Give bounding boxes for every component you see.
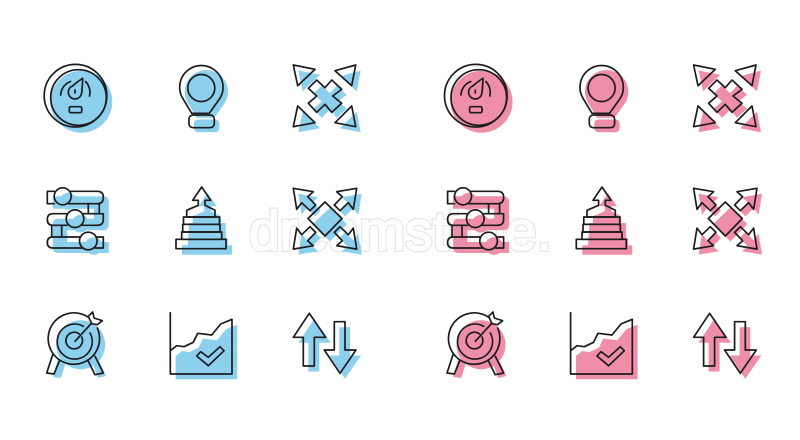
watermark: dreamstime. [249, 199, 552, 262]
icon set: blue [44, 64, 362, 379]
icon set: pink [444, 64, 762, 379]
icon: area chart with check pink [571, 313, 638, 379]
icon: sliders [47, 188, 109, 255]
watermark: dreamstime. [249, 199, 552, 262]
icon: up and down arrows pink [694, 313, 761, 379]
icon: target with arrow pink [447, 312, 506, 378]
icon: speedometer gauge [44, 64, 112, 133]
icon: target with arrow [47, 312, 106, 378]
icon: pyramid with arrow [176, 187, 232, 255]
icon: sliders pink [448, 188, 509, 255]
icon: four arrows with cross pink [694, 65, 761, 132]
icon: four arrows with cross [293, 65, 361, 132]
icon: map pin pink [580, 66, 628, 132]
icon: pyramid with arrow pink [576, 187, 632, 255]
icon: speedometer gauge pink [444, 64, 513, 133]
icon: map pin [180, 66, 228, 132]
icon: expanding arrows with diamond [293, 188, 362, 255]
icon: area chart with check [170, 313, 237, 379]
icon: expanding arrows with diamond pink [694, 188, 762, 255]
icon: up and down arrows [293, 313, 361, 379]
